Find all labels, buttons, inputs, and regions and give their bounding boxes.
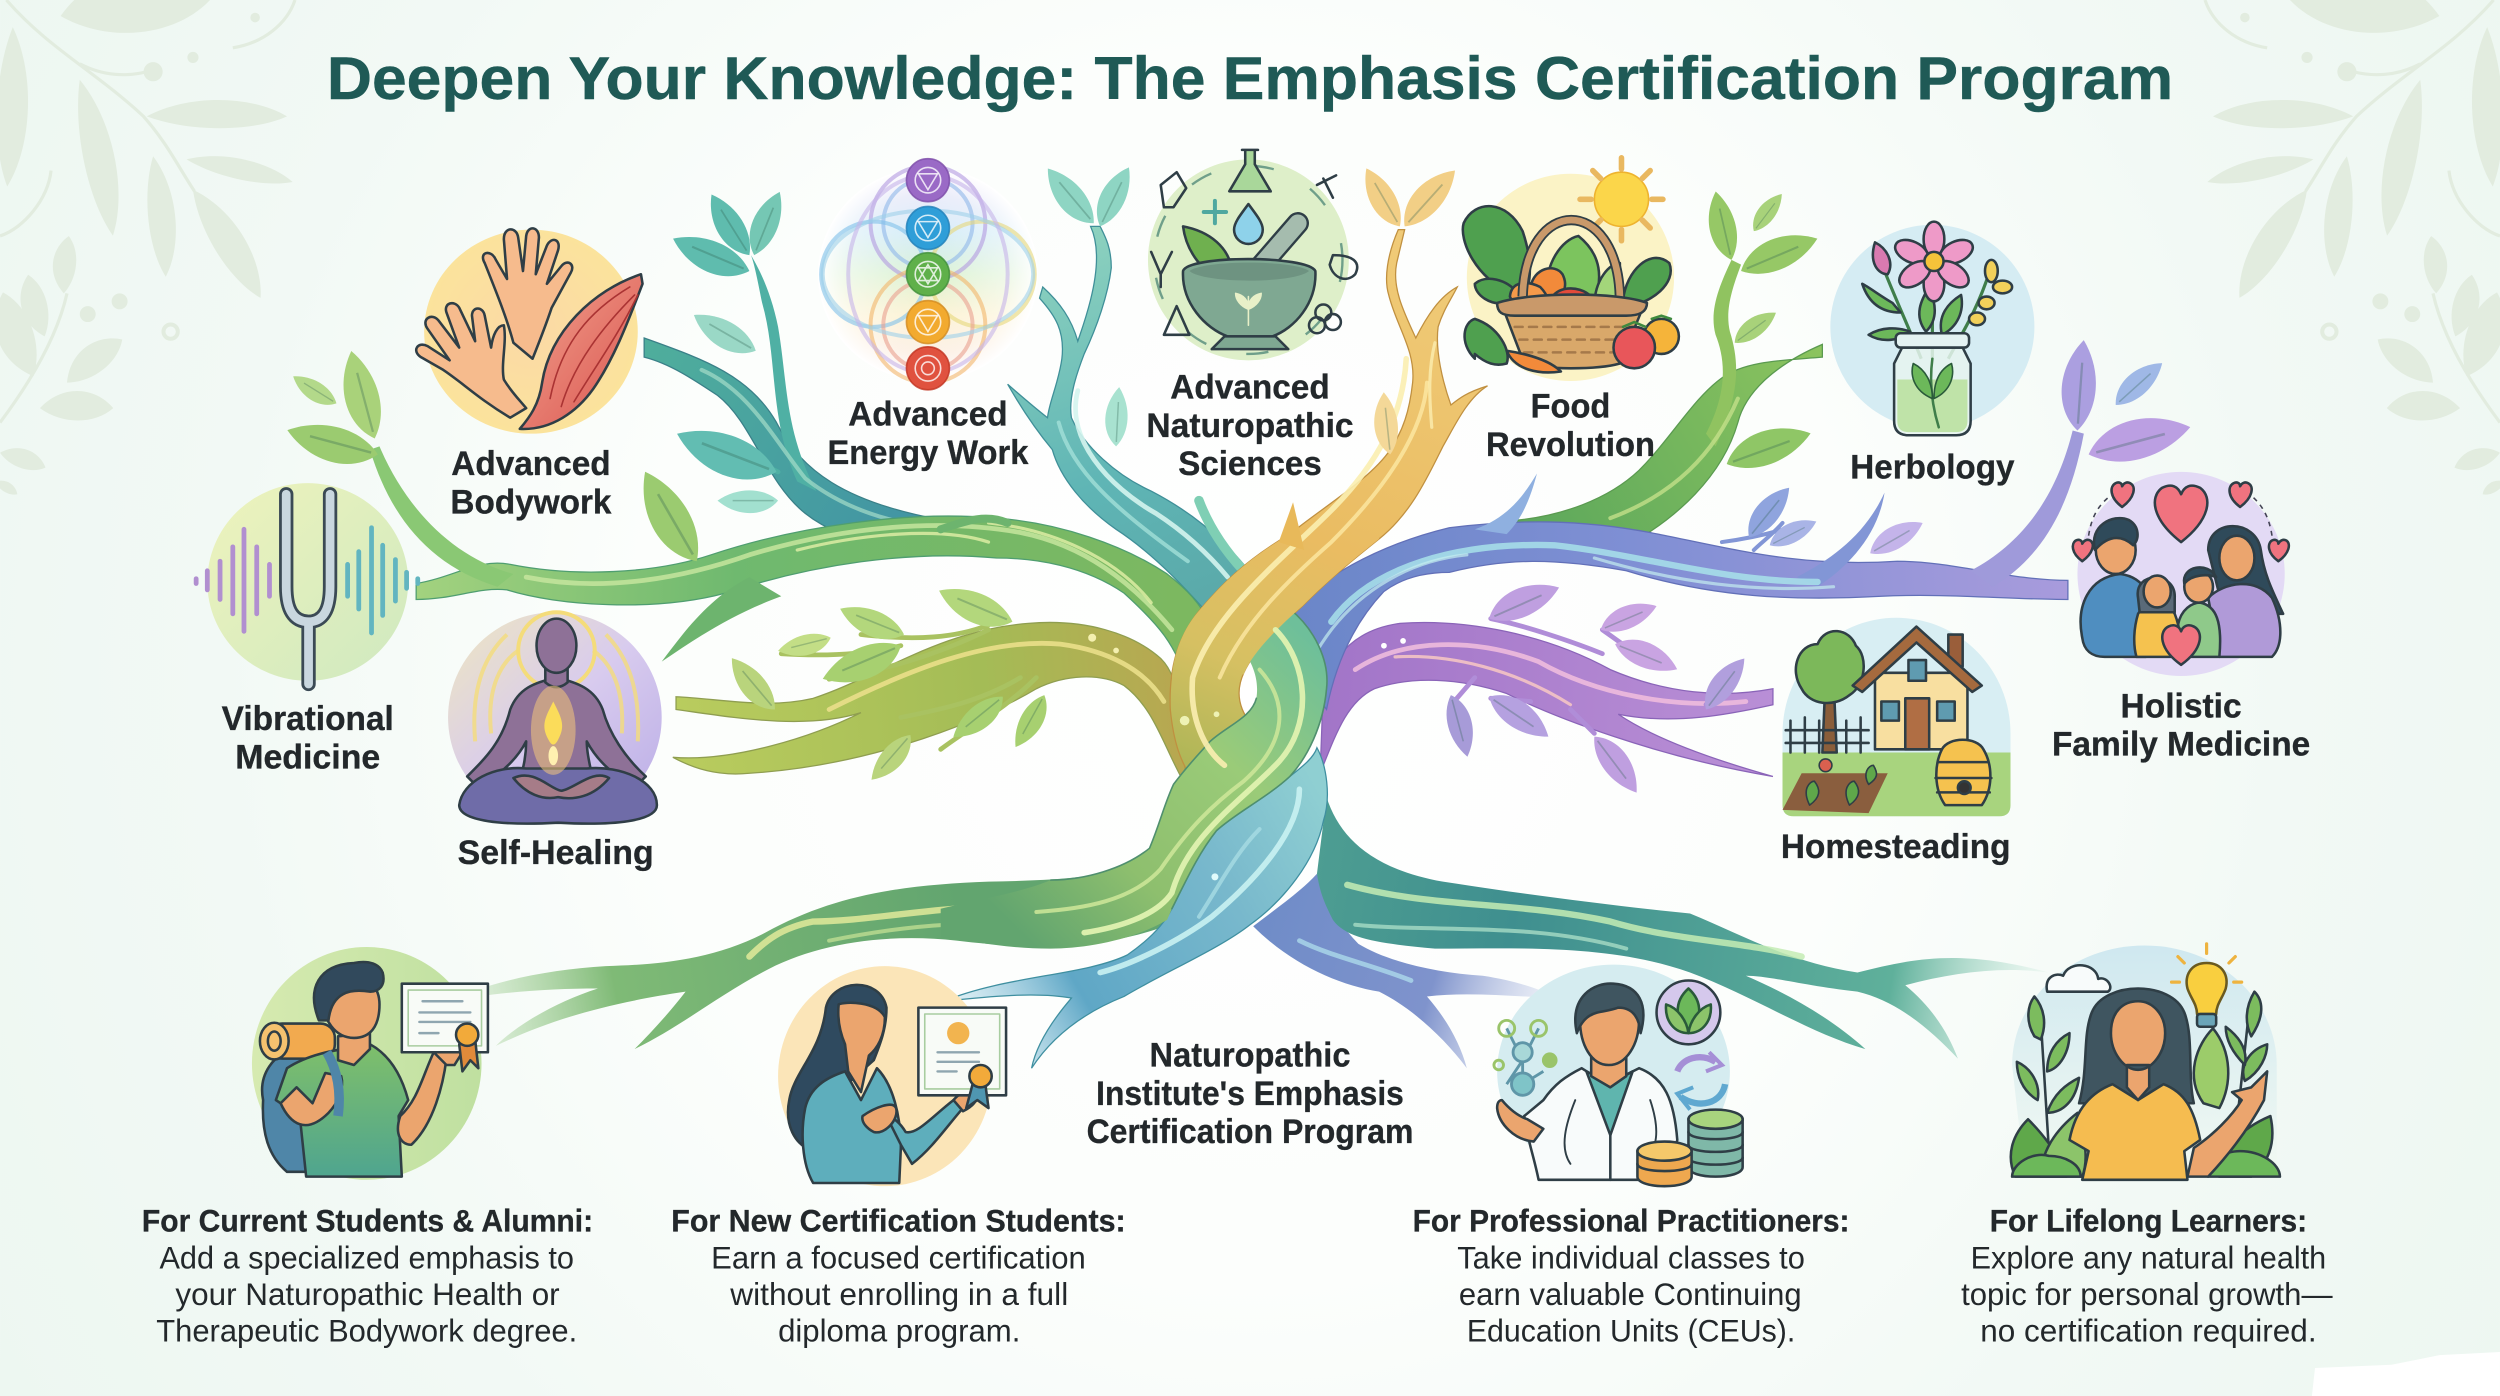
mortar bbox=[1183, 259, 1315, 349]
label: homesteading: Homesteading bbox=[1781, 828, 2010, 866]
plants left bbox=[2011, 996, 2086, 1177]
text block: lifelong learners bbox=[1961, 1203, 2333, 1349]
text block: professional practitioners: Take individual classes to bbox=[1457, 1239, 1805, 1275]
boy bbox=[2178, 567, 2220, 657]
coat bbox=[1524, 1068, 1677, 1180]
label: advanced bodywork bbox=[450, 445, 612, 521]
label: advanced naturopathic sciences: Sciences bbox=[1178, 445, 1322, 483]
text block: current students: Therapeutic Bodywork degree. bbox=[156, 1313, 577, 1349]
tuning fork bbox=[286, 494, 330, 684]
shirt bbox=[276, 1044, 408, 1177]
corner foliage: top right bbox=[2205, 0, 2500, 498]
waveform left bbox=[196, 529, 269, 631]
text block: professional practitioners: Education Units (CEUs). bbox=[1467, 1313, 1795, 1349]
icon: food revolution bbox=[1463, 158, 1679, 381]
light bulb bbox=[2172, 944, 2242, 1027]
molecule bbox=[1494, 1020, 1556, 1095]
hands bbox=[416, 228, 572, 418]
icon: advanced energy work bbox=[818, 159, 1038, 390]
label: self-healing: Self-Healing bbox=[458, 834, 654, 872]
cycle arrows bbox=[1677, 1052, 1725, 1110]
text block: current students: For Current Students & Alumni: bbox=[142, 1203, 593, 1239]
icon: current students and alumni bbox=[252, 947, 488, 1180]
waveform right bbox=[348, 528, 418, 633]
icon: advanced bodywork bbox=[416, 228, 643, 434]
left hand bbox=[1497, 1100, 1543, 1142]
label: vibrational medicine bbox=[222, 700, 394, 776]
basket bbox=[1497, 295, 1647, 368]
beehive bbox=[1936, 740, 1991, 805]
seal bbox=[966, 1065, 992, 1108]
plants right bbox=[2194, 992, 2272, 1177]
text block: new certification students: diploma program. bbox=[778, 1313, 1020, 1349]
tree bbox=[282, 160, 2195, 1068]
cloud bbox=[2047, 965, 2110, 992]
certificate bbox=[918, 1008, 1006, 1095]
text block: lifelong learners: For Lifelong Learners: bbox=[1990, 1203, 2307, 1239]
title: Deepen Your Knowledge: The Emphasis Certification Program bbox=[327, 44, 2173, 112]
text block: new certification students bbox=[671, 1203, 1126, 1349]
center label bbox=[1087, 1037, 1413, 1151]
face and neck bbox=[838, 1003, 885, 1092]
leafy greens bbox=[1463, 206, 1671, 365]
man bbox=[2081, 518, 2153, 657]
branch: green to herbology bbox=[1502, 188, 1823, 540]
branch: lilac to homesteading bbox=[1320, 573, 1773, 800]
text block: new certification students: For New Certification Students: bbox=[671, 1203, 1126, 1239]
vegetables in basket bbox=[1510, 268, 1591, 312]
label: herbology: Herbology bbox=[1850, 448, 2014, 486]
center label: Naturopathic bbox=[1150, 1037, 1350, 1075]
icon: lifelong learners bbox=[2011, 944, 2280, 1180]
halo bbox=[474, 612, 638, 741]
text block: professional practitioners: earn valuable Continuing bbox=[1459, 1276, 1802, 1312]
icon: holistic family medicine bbox=[2073, 472, 2289, 676]
hair bbox=[788, 985, 886, 1151]
dashed orbit bbox=[1154, 166, 1342, 354]
label: advanced bodywork: Advanced bbox=[451, 445, 611, 483]
center label: Certification Program bbox=[1087, 1113, 1413, 1151]
label: advanced energy work: Energy Work bbox=[828, 434, 1029, 472]
icon: vibrational medicine bbox=[196, 483, 418, 684]
label: food revolution: Revolution bbox=[1486, 426, 1655, 464]
text block: lifelong learners: topic for personal growth— bbox=[1961, 1276, 2333, 1312]
bedroll bbox=[260, 1023, 335, 1059]
pestle bbox=[1256, 223, 1298, 271]
hearts bbox=[2073, 482, 2289, 561]
branch: teal to advanced bodywork bbox=[644, 187, 1020, 548]
label: advanced naturopathic sciences bbox=[1146, 369, 1354, 483]
hair bbox=[2079, 988, 2194, 1103]
head bbox=[314, 962, 384, 1065]
bottom right patch bbox=[2312, 1352, 2500, 1396]
label: advanced naturopathic sciences: Advanced bbox=[1170, 369, 1330, 407]
branch: green to vibrational medicine bbox=[282, 347, 1212, 686]
woman bbox=[2208, 526, 2283, 657]
body bbox=[803, 1068, 901, 1183]
girl bbox=[2134, 576, 2180, 657]
icon: self-healing bbox=[448, 612, 662, 824]
shirt bbox=[2069, 1084, 2200, 1180]
label: advanced bodywork: Bodywork bbox=[450, 483, 612, 521]
meditating figure bbox=[459, 619, 657, 824]
label: holistic family medicine: Holistic bbox=[2121, 687, 2242, 725]
text block: new certification students: Earn a focused certification bbox=[711, 1239, 1086, 1275]
arms bbox=[281, 1036, 462, 1145]
sun bbox=[1580, 158, 1663, 241]
flower bbox=[1891, 222, 1977, 301]
text block: current students: Add a specialized emphasis to bbox=[159, 1239, 574, 1275]
plus sign bbox=[1204, 201, 1226, 223]
garden bbox=[1783, 759, 1888, 813]
bushes bbox=[2012, 1151, 2280, 1177]
trunk twist bbox=[941, 160, 1488, 1068]
text block: professional practitioners: For Professional Practitioners: bbox=[1413, 1203, 1849, 1239]
coin stacks bbox=[1637, 1110, 1743, 1186]
leaves bbox=[1862, 284, 1962, 340]
basket handle bbox=[1523, 220, 1620, 297]
text block: lifelong learners: Explore any natural health bbox=[1971, 1239, 2326, 1275]
text block: current students bbox=[142, 1203, 593, 1349]
house bbox=[1853, 627, 1982, 749]
muscle bbox=[520, 274, 643, 429]
arm holding certificate bbox=[862, 1091, 977, 1164]
stems bbox=[1885, 271, 1990, 359]
roots bbox=[446, 797, 2049, 1068]
certificate bbox=[402, 984, 488, 1052]
label: vibrational medicine: Vibrational bbox=[222, 700, 394, 738]
label: advanced energy work bbox=[828, 396, 1029, 472]
strap bbox=[327, 1052, 339, 1116]
inner flame bbox=[531, 686, 576, 775]
rings bbox=[821, 166, 1035, 383]
centre heart bbox=[2162, 625, 2200, 665]
arm bbox=[2187, 1071, 2267, 1177]
head bbox=[1575, 984, 1643, 1087]
seal bbox=[456, 1024, 478, 1071]
corner foliage: top left bbox=[0, 0, 295, 498]
icon: herbology bbox=[1830, 222, 2034, 435]
yellow sprig bbox=[1969, 260, 2012, 325]
ground bbox=[1783, 753, 2010, 816]
text block: lifelong learners: no certification required. bbox=[1980, 1313, 2317, 1349]
bud bbox=[1873, 242, 1890, 274]
tree bbox=[1796, 631, 1864, 753]
text block: new certification students: without enrolling in a full bbox=[729, 1276, 1068, 1312]
text block: current students: your Naturopathic Health or bbox=[175, 1276, 560, 1312]
dashed arcs bbox=[2089, 494, 2272, 536]
water drop bbox=[1234, 204, 1263, 244]
science symbols bbox=[1151, 172, 1357, 335]
label: food revolution bbox=[1486, 388, 1655, 464]
text block: professional practitioners bbox=[1413, 1203, 1849, 1349]
branch: olive to self-healing bbox=[673, 578, 1188, 789]
label: food revolution: Food bbox=[1531, 388, 1610, 426]
fence bbox=[1786, 717, 1869, 753]
backpack bbox=[262, 1046, 351, 1172]
flask bbox=[1229, 150, 1271, 191]
leaf badge bbox=[1657, 981, 1720, 1044]
label: advanced energy work: Advanced bbox=[848, 396, 1008, 434]
icon: professional practitioners bbox=[1494, 965, 1743, 1186]
face bbox=[2111, 1001, 2165, 1100]
icon: advanced naturopathic sciences bbox=[1148, 150, 1357, 360]
label: advanced naturopathic sciences: Naturopathic bbox=[1146, 407, 1354, 445]
label: holistic family medicine: Family Medicine bbox=[2052, 726, 2310, 764]
chakra stack bbox=[906, 159, 949, 390]
center label: Institute's Emphasis bbox=[1096, 1075, 1404, 1113]
icon: homesteading bbox=[1783, 618, 2010, 816]
label: vibrational medicine: Medicine bbox=[235, 738, 380, 776]
jar bbox=[1894, 333, 1971, 435]
mortar leaf bbox=[1183, 226, 1232, 281]
icon: new certification students bbox=[778, 966, 1006, 1186]
branch: teal to advanced naturopathic sciences bbox=[1008, 161, 1252, 609]
loose produce bbox=[1507, 316, 1679, 372]
branch: purple to holistic family medicine bbox=[1276, 339, 2195, 709]
label: holistic family medicine bbox=[2052, 687, 2310, 764]
